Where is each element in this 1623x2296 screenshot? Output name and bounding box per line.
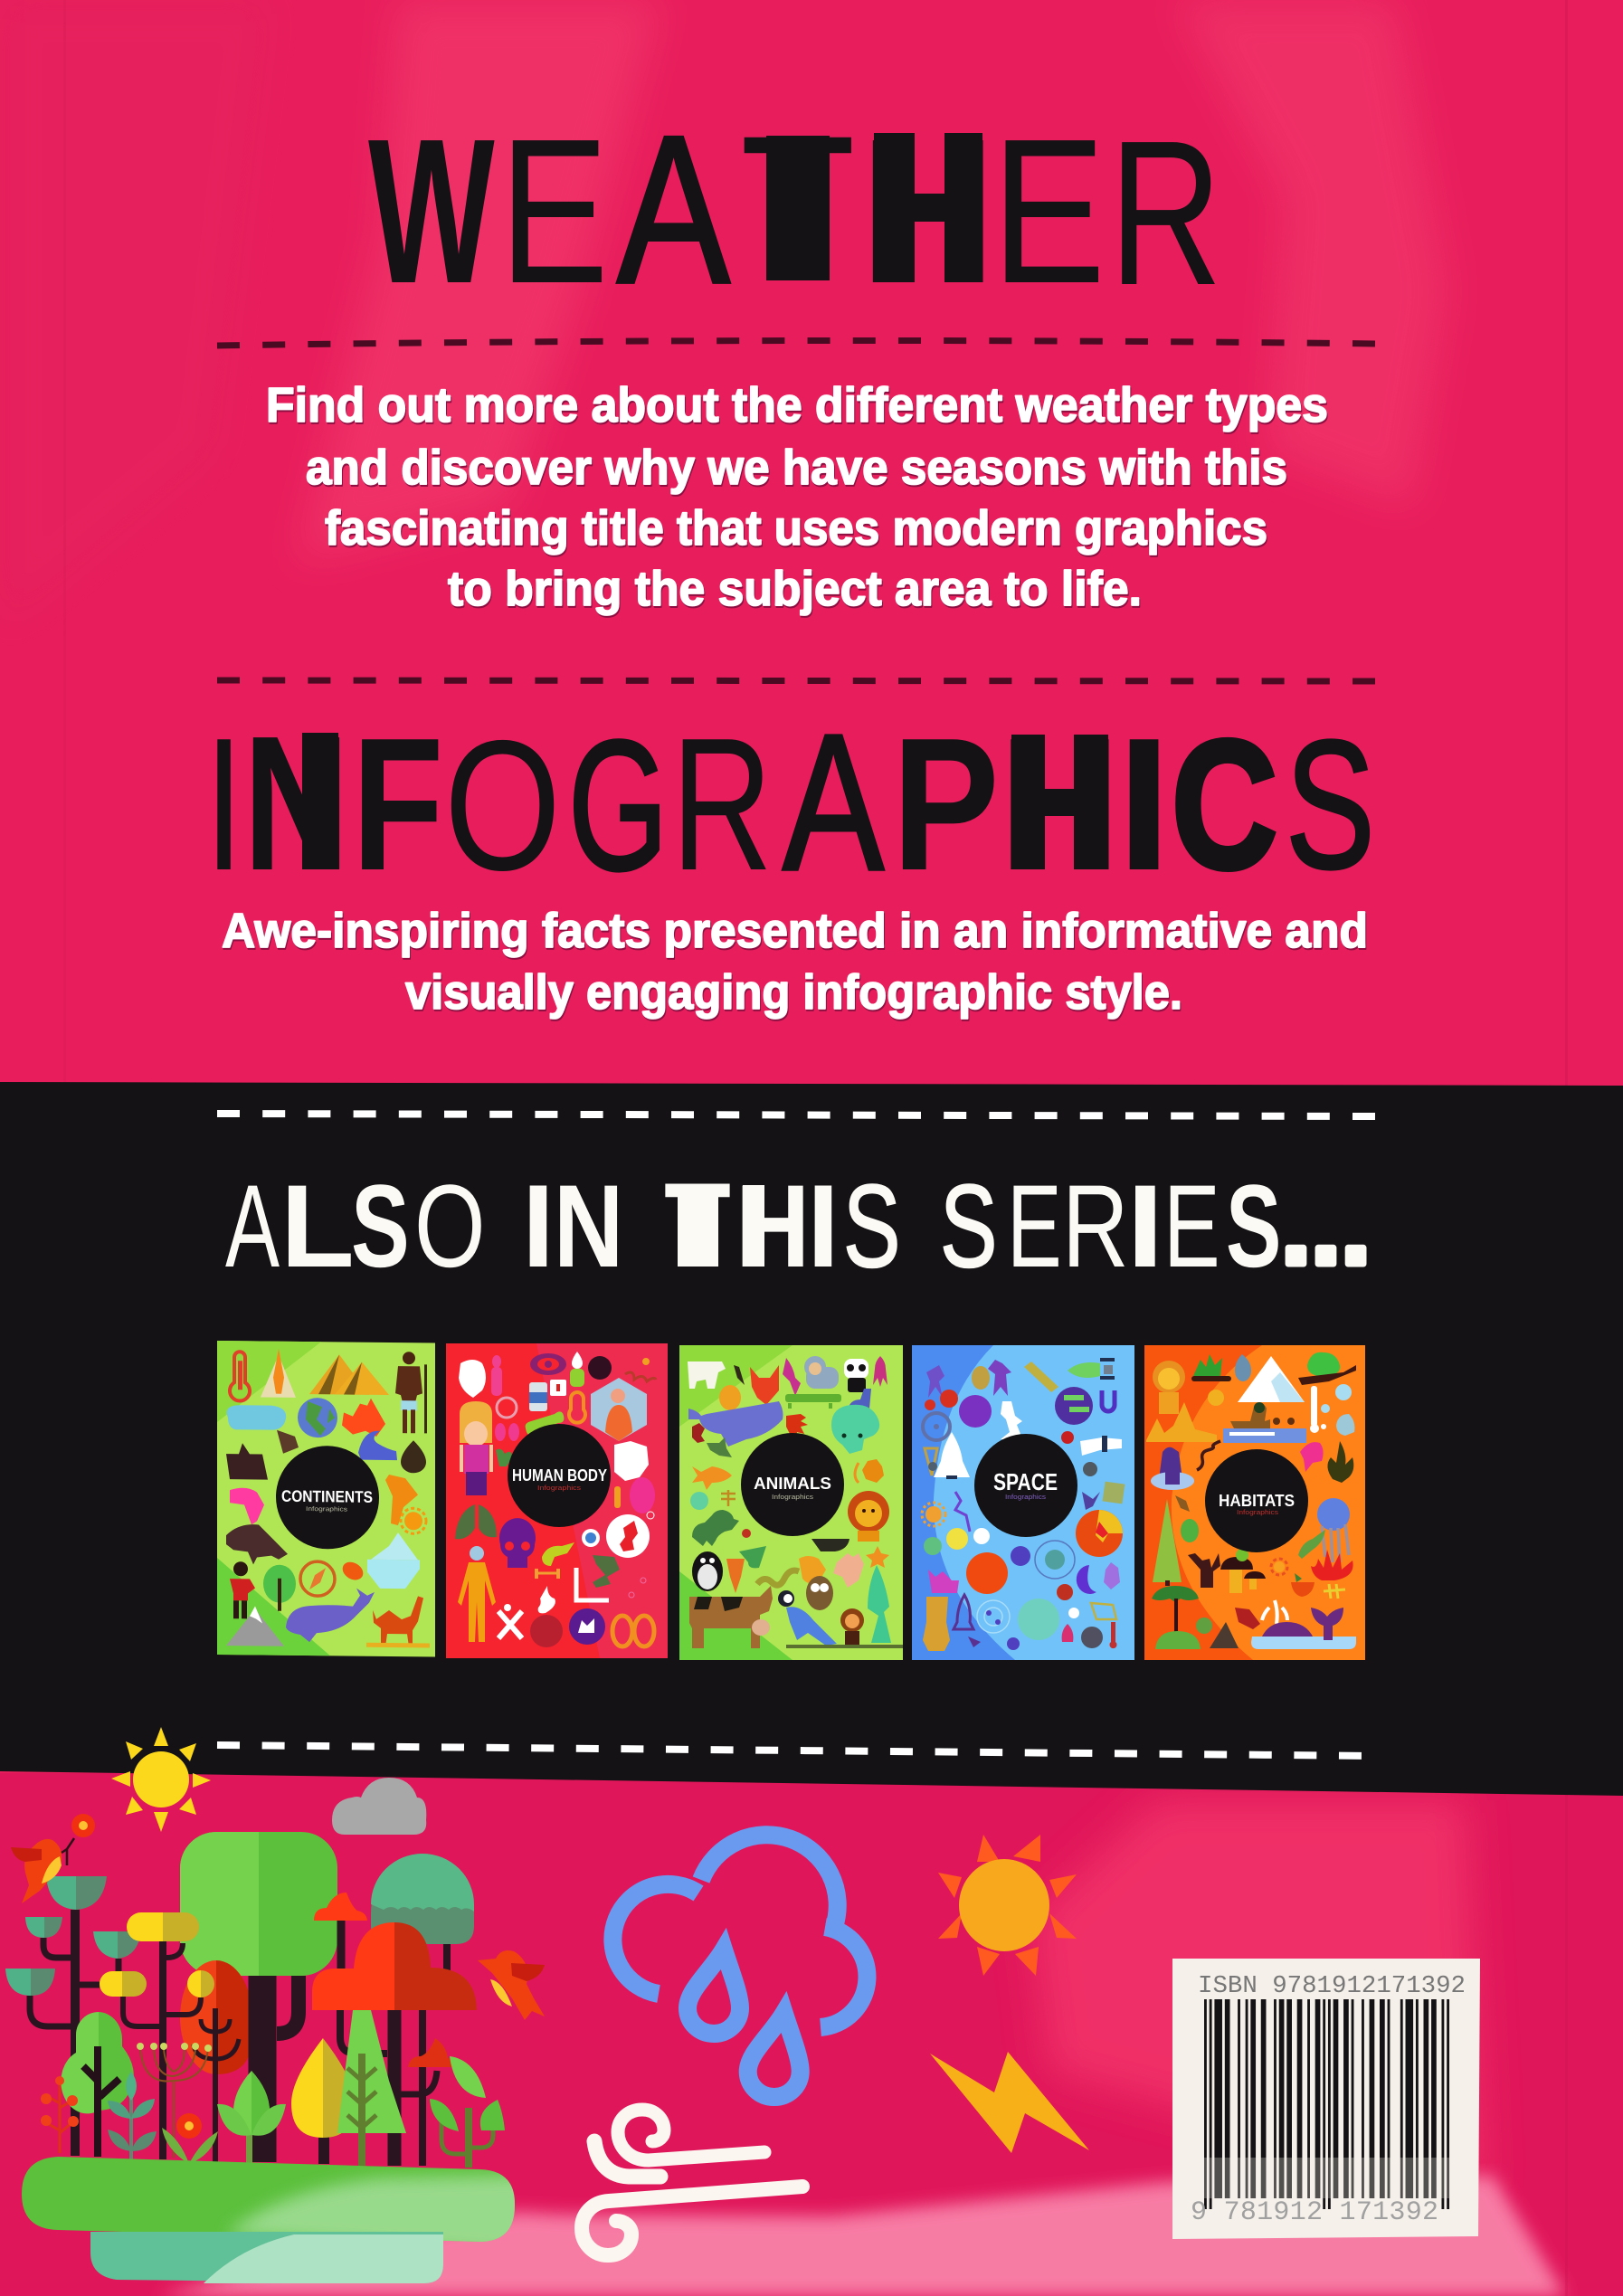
green leaf bush bbox=[217, 2071, 286, 2164]
bird left with flower bbox=[11, 1814, 95, 1903]
barcode bars bbox=[1204, 1999, 1449, 2209]
teal bowls bbox=[5, 1876, 141, 1996]
heading: ALSO IN THIS SERIES: S bbox=[1226, 1160, 1281, 1292]
fern tree bbox=[347, 2054, 376, 2166]
cover icons: habitats bbox=[1146, 1352, 1356, 1649]
heading: INFOGRAPHICS: S bbox=[1286, 702, 1375, 906]
heading: ALSO IN THIS SERIES: A bbox=[225, 1161, 280, 1292]
ground bbox=[22, 2157, 515, 2242]
heading: ALSO IN THIS SERIES: S bbox=[940, 1162, 997, 1293]
ISBN number: ISBN 9781912171392 bbox=[1198, 1973, 1466, 2000]
heading: INFOGRAPHICS: C bbox=[1172, 702, 1277, 906]
text block: weather description: to bring the subject area to life. bbox=[448, 562, 1142, 616]
text block: weather description: Find out more about the different weather types bbox=[266, 378, 1328, 432]
panel: black series band bbox=[0, 1082, 1623, 1796]
barcode glare bbox=[1203, 2158, 1449, 2198]
title: WEATHER: T bbox=[740, 92, 856, 325]
water bbox=[90, 2232, 443, 2283]
divider: dashed line under title bbox=[217, 340, 1376, 346]
cover icons: human body bbox=[455, 1352, 656, 1647]
cover badge: Habitats bbox=[1205, 1449, 1308, 1552]
panel: barcode bbox=[1172, 1959, 1480, 2239]
heading: ALSO IN THIS SERIES bbox=[225, 1158, 1371, 1293]
heading: INFOGRAPHICS: N bbox=[243, 696, 349, 910]
heading: ALSO IN THIS SERIES: O bbox=[414, 1161, 486, 1292]
cover badge: Human Body bbox=[508, 1424, 611, 1527]
heading: ALSO IN THIS SERIES: I bbox=[522, 1162, 555, 1292]
heading: ALSO IN THIS SERIES: H bbox=[736, 1160, 810, 1292]
book cover: Human Body bbox=[446, 1343, 668, 1658]
icon: lightning bolt bbox=[930, 2052, 1089, 2153]
book cover: Space bbox=[912, 1345, 1134, 1660]
heading: INFOGRAPHICS: G bbox=[568, 702, 668, 909]
heading: INFOGRAPHICS: H bbox=[1000, 698, 1120, 910]
cover badge: Continents: Infographics bbox=[306, 1506, 348, 1513]
small red clouds bbox=[314, 1893, 461, 2067]
icon: orange sun bbox=[938, 1835, 1077, 1976]
heading: ALSO IN THIS SERIES: N bbox=[554, 1161, 623, 1292]
divider: white dashed line bottom bbox=[217, 1745, 1376, 1756]
heading: INFOGRAPHICS: R bbox=[671, 697, 773, 909]
title: WEATHER: R bbox=[1109, 98, 1222, 327]
icon: yellow sun bbox=[111, 1727, 211, 1832]
heading: ALSO IN THIS SERIES: S bbox=[351, 1161, 410, 1292]
big tree crown bbox=[180, 1832, 337, 1976]
cover badge: Continents: CONTINENTS bbox=[281, 1487, 373, 1506]
book cover: Habitats bbox=[1144, 1345, 1365, 1660]
cover badge: Animals: Infographics bbox=[772, 1494, 814, 1501]
heading: ALSO IN THIS SERIES: I bbox=[1126, 1160, 1164, 1292]
title: WEATHER: E bbox=[499, 96, 609, 327]
icon: wind swirl bbox=[582, 2110, 802, 2255]
text block: weather description: fascinating title that uses modern graphics bbox=[325, 501, 1267, 555]
teal leaf plant bbox=[108, 2072, 157, 2162]
vine plant bbox=[430, 2056, 505, 2168]
book cover: Animals bbox=[679, 1345, 903, 1660]
title: WEATHER: W bbox=[368, 96, 495, 327]
icon: grey cloud bbox=[332, 1778, 426, 1835]
text block: weather description: and discover why we have seasons with this bbox=[306, 441, 1287, 495]
heading: ALSO IN THIS SERIES: ... bbox=[1281, 1167, 1371, 1287]
text block: series description: Awe-inspiring facts presented in an informative and bbox=[222, 904, 1368, 958]
yellow drop tree bbox=[291, 2038, 355, 2164]
divider: white dashed line top bbox=[217, 1114, 1376, 1116]
cover badge: Space: SPACE bbox=[993, 1468, 1058, 1495]
red oval tree bbox=[180, 1960, 252, 2074]
heading: ALSO IN THIS SERIES: S bbox=[843, 1162, 900, 1293]
red cloud canopy bbox=[312, 1922, 477, 2010]
cover badge: Space bbox=[974, 1434, 1077, 1537]
title: WEATHER bbox=[368, 91, 1222, 327]
green tree with trunk bbox=[61, 2012, 134, 2157]
book cover: Continents bbox=[217, 1341, 435, 1657]
heading: INFOGRAPHICS: A bbox=[783, 693, 884, 911]
cover badge: Human Body: HUMAN BODY bbox=[512, 1466, 607, 1485]
title: WEATHER: E bbox=[992, 96, 1106, 327]
heading: ALSO IN THIS SERIES: E bbox=[1007, 1160, 1062, 1292]
illustration: forest bbox=[5, 1814, 545, 2283]
cover badge: Human Body: Infographics bbox=[537, 1485, 582, 1492]
bird right bbox=[478, 1950, 545, 2020]
text block: series description: visually engaging infographic style. bbox=[405, 965, 1182, 1020]
cover icons: animals bbox=[688, 1356, 903, 1648]
heading: INFOGRAPHICS: O bbox=[444, 701, 561, 909]
cover badge: Animals bbox=[741, 1433, 844, 1536]
icon: rain cloud bbox=[612, 1835, 867, 2097]
heading: ALSO IN THIS SERIES: I bbox=[807, 1162, 840, 1292]
cover icons: space bbox=[922, 1358, 1125, 1651]
cover badge: Space: Infographics bbox=[1005, 1494, 1047, 1501]
heading: INFOGRAPHICS: I bbox=[1116, 699, 1172, 910]
heading: INFOGRAPHICS: P bbox=[892, 699, 1000, 910]
heading: INFOGRAPHICS bbox=[204, 693, 1375, 911]
teal dome tree bbox=[371, 1854, 474, 1980]
title: WEATHER: H bbox=[860, 97, 995, 327]
heading: ALSO IN THIS SERIES: E bbox=[1163, 1161, 1220, 1293]
cover badge: Habitats: HABITATS bbox=[1219, 1492, 1295, 1510]
cover badge: Animals: ANIMALS bbox=[754, 1475, 831, 1493]
heading: ALSO IN THIS SERIES: T bbox=[664, 1158, 731, 1292]
divider: dashed line above infographics bbox=[217, 680, 1376, 681]
heading: INFOGRAPHICS: F bbox=[352, 698, 443, 909]
heading: ALSO IN THIS SERIES: L bbox=[280, 1160, 355, 1292]
cover icons: continents bbox=[226, 1348, 430, 1647]
title: WEATHER: A bbox=[617, 91, 730, 327]
berry plant bbox=[41, 2076, 79, 2153]
dark trunks and branches bbox=[30, 1910, 437, 2166]
heading: INFOGRAPHICS: I bbox=[204, 697, 243, 909]
barcode digits: 9 781912 171392 bbox=[1191, 2197, 1438, 2228]
yellow pills bbox=[100, 1912, 214, 1997]
heading: ALSO IN THIS SERIES: R bbox=[1062, 1160, 1129, 1292]
red flower plant bbox=[162, 2113, 218, 2164]
text block: series description bbox=[222, 904, 1368, 1020]
seed stems bbox=[137, 2043, 212, 2158]
text block: weather description bbox=[266, 378, 1328, 616]
green triangle tree bbox=[337, 2010, 406, 2133]
cover badge: Continents bbox=[276, 1446, 379, 1550]
cover badge: Habitats: Infographics bbox=[1237, 1510, 1279, 1516]
